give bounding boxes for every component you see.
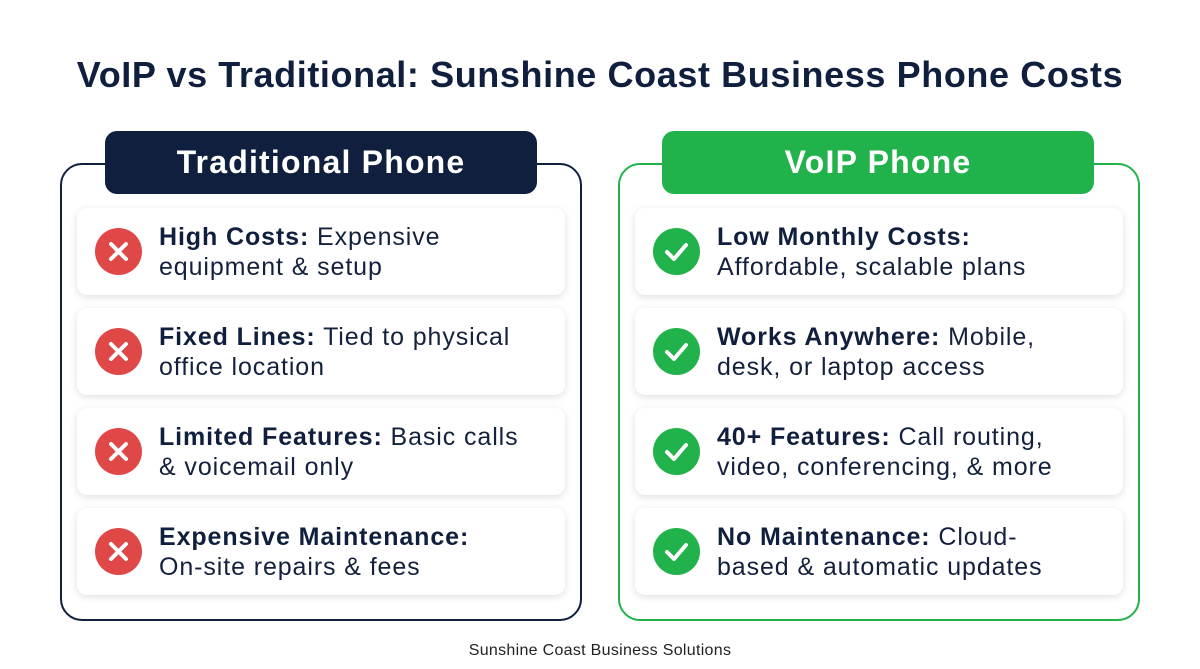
card: 40+ features: video, conferencing, & more (717, 453, 1053, 481)
card: fixed lines: Fixed Lines: Tied to physical (159, 323, 510, 351)
card: fixed lines (77, 308, 565, 395)
card: high costs (77, 208, 565, 295)
card: works anywhere (635, 308, 1123, 395)
card: limited features: Limited Features: Basic calls (159, 423, 519, 451)
card: no maintenance: based & automatic updates (717, 553, 1042, 581)
card: fixed lines: office location (159, 353, 325, 381)
card: low monthly costs (635, 208, 1123, 295)
card: low monthly costs: Low Monthly Costs: (717, 223, 971, 251)
card: expensive maintenance: Expensive Maintenance: (159, 523, 469, 551)
card: no maintenance (635, 508, 1123, 595)
card: 40+ features (635, 408, 1123, 495)
card: low monthly costs: Affordable, scalable plans (717, 253, 1026, 281)
title: VoIP vs Traditional: Sunshine Coast Business Phone Costs (77, 54, 1123, 95)
panel: traditional (60, 163, 582, 621)
card: works anywhere: Works Anywhere: Mobile, (717, 323, 1035, 351)
card: limited features (77, 408, 565, 495)
card: high costs: High Costs: Expensive (159, 223, 440, 251)
card: no maintenance: No Maintenance: Cloud- (717, 523, 1017, 551)
card: works anywhere: desk, or laptop access (717, 353, 986, 381)
card: 40+ features: 40+ Features: Call routing, (717, 423, 1044, 451)
footer: Sunshine Coast Business Solutions (469, 642, 731, 659)
tab: traditional phone: Traditional Phone (177, 144, 465, 180)
card: expensive maintenance: On-site repairs & fees (159, 553, 421, 581)
card: high costs: equipment & setup (159, 253, 383, 281)
card: limited features: & voicemail only (159, 453, 354, 481)
panel: voip (618, 163, 1140, 621)
tab: traditional phone (105, 131, 537, 194)
card: expensive maintenance (77, 508, 565, 595)
tab: voip phone: VoIP Phone (785, 144, 971, 180)
tab: voip phone (662, 131, 1094, 194)
